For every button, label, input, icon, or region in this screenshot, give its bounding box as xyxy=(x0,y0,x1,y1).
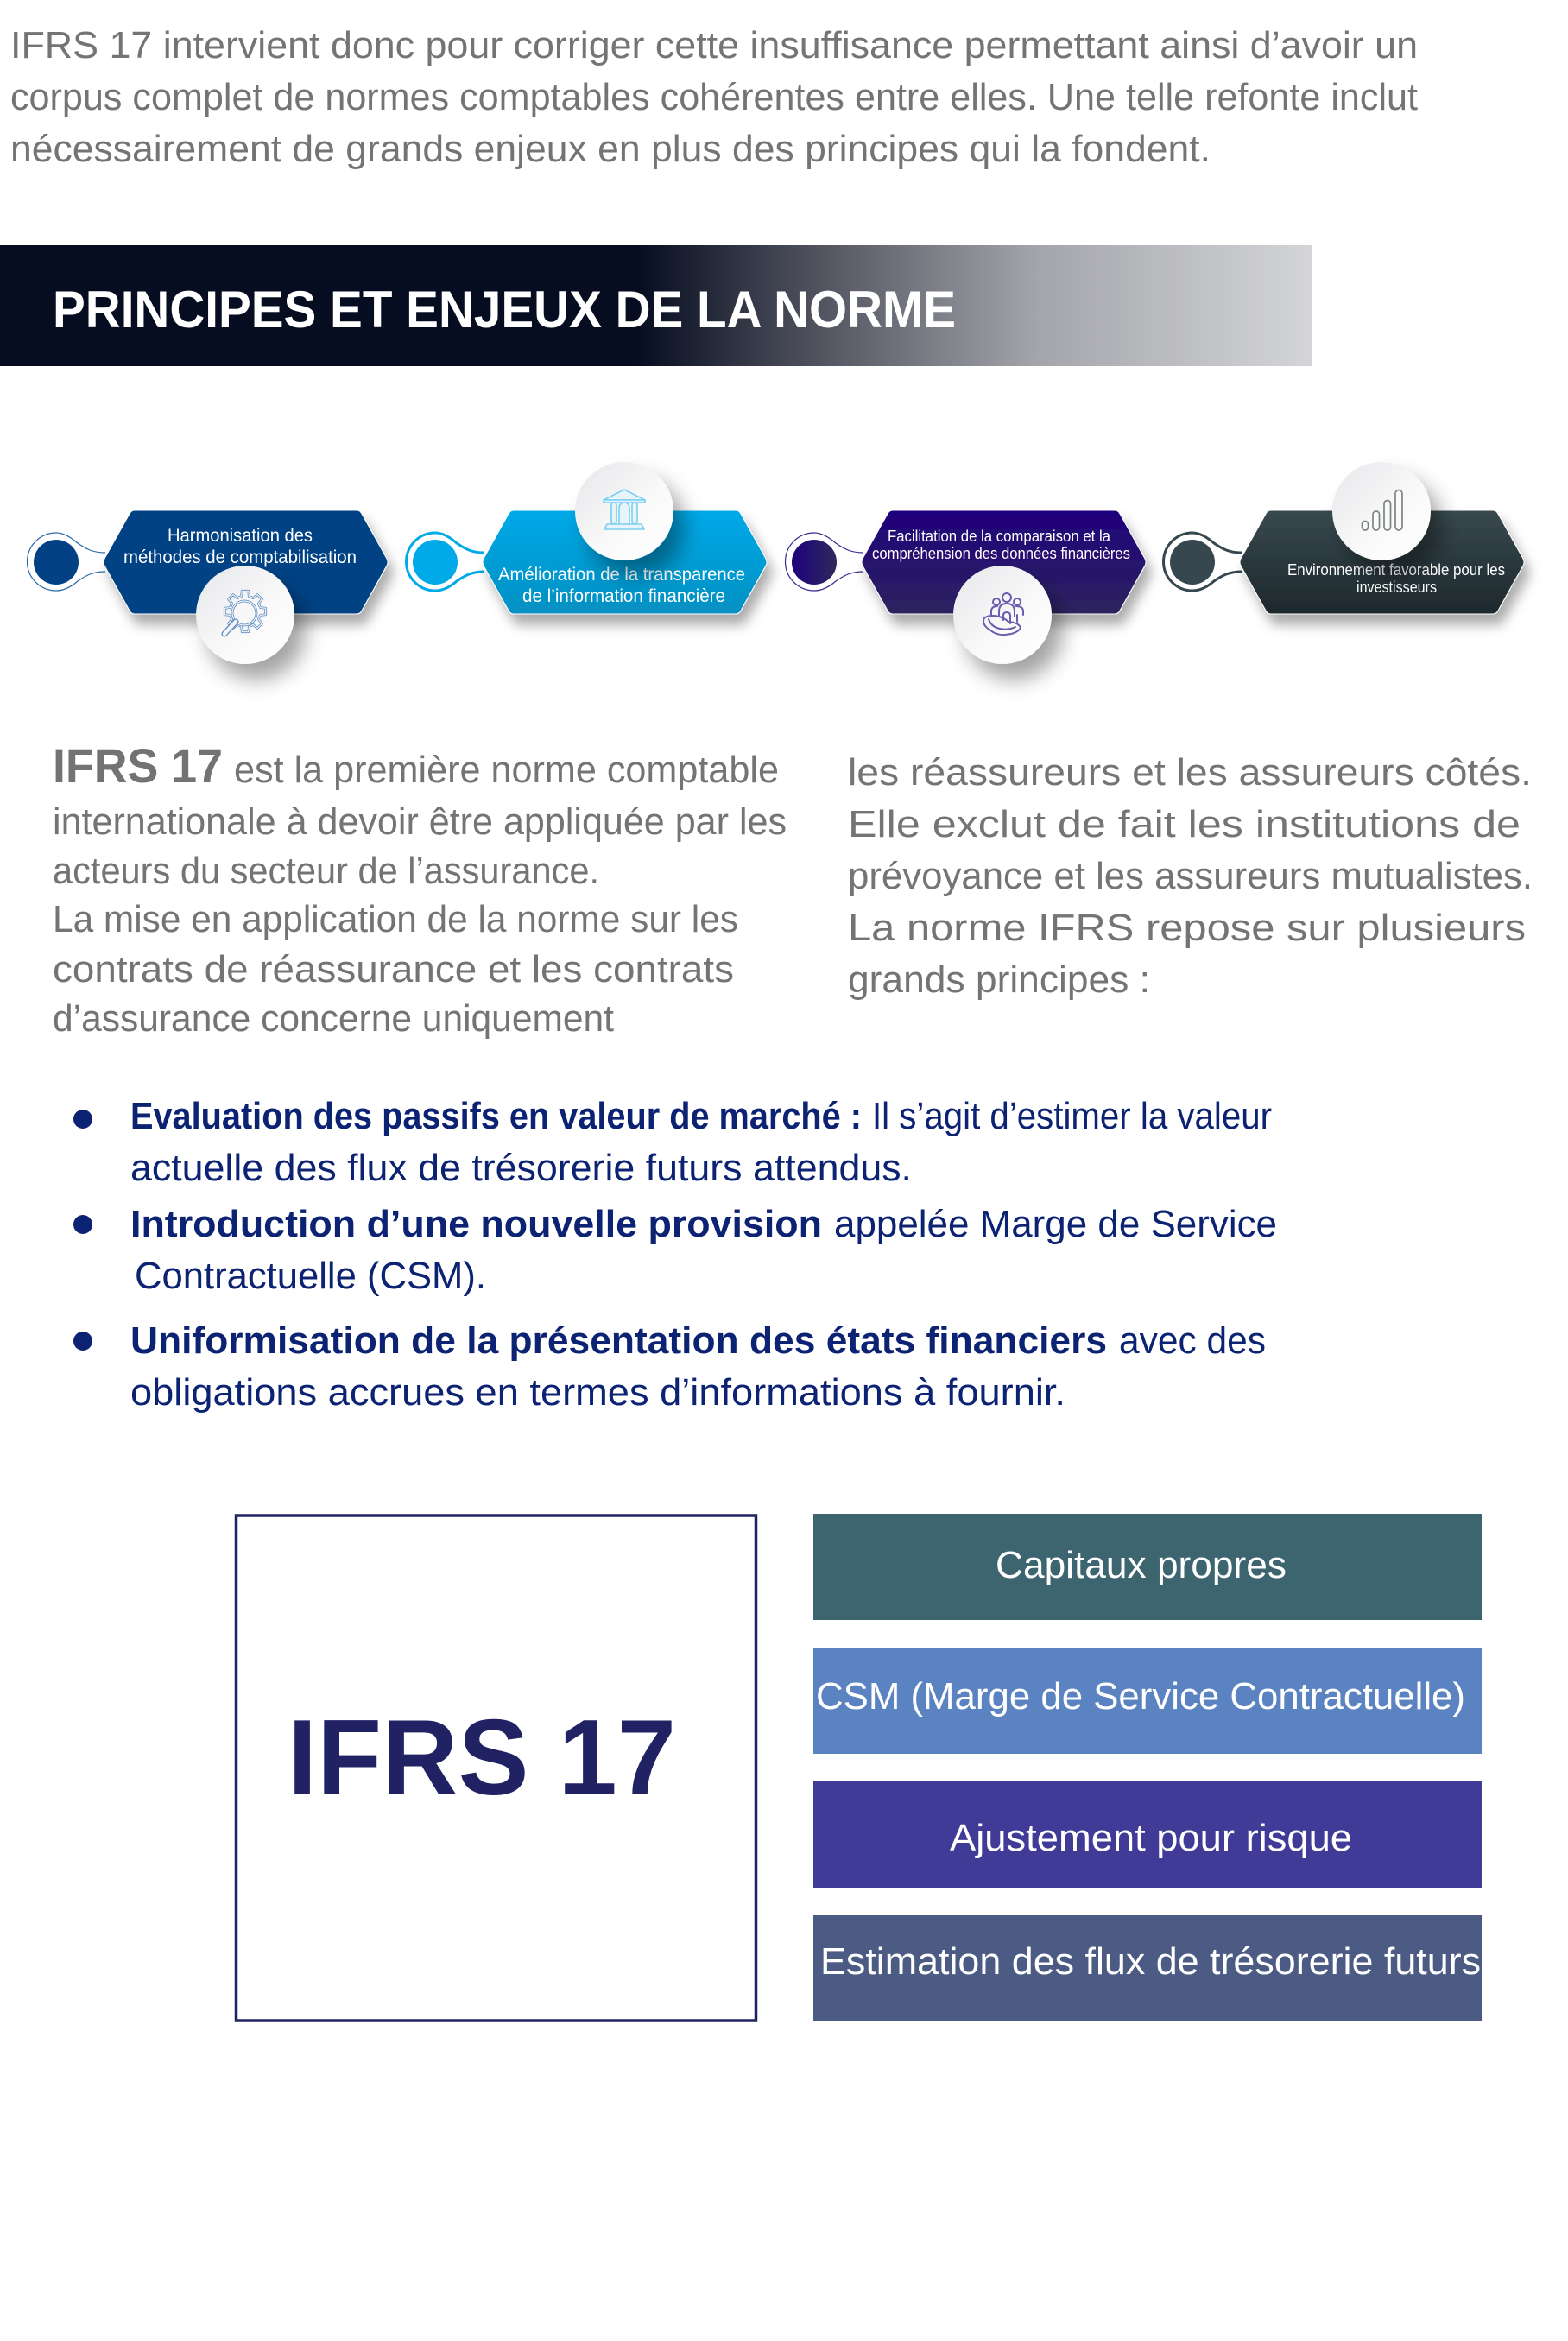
bullet: provision: appelée Marge de Service xyxy=(834,1203,1277,1245)
panel: harmonisation xyxy=(27,510,388,664)
hexagon label: investisseurs xyxy=(1356,579,1437,596)
left text column: La mise en application de la norme sur les xyxy=(53,898,738,940)
right text column: Elle exclut de fait les institutions de xyxy=(848,803,1521,845)
bullet: evaluation: Evaluation des passifs en valeur de marché : xyxy=(130,1095,862,1137)
intro paragraph: IFRS 17 intervient donc pour corriger cette insuffisance permettant ainsi d’avoir un xyxy=(10,24,1418,66)
bar: ajustement pour risque: Ajustement pour risque xyxy=(950,1817,1352,1859)
hexagon label xyxy=(1240,510,1524,614)
panel: transparence xyxy=(406,462,767,614)
hexagon label: Amélioration de la transparence xyxy=(498,565,745,585)
connector knob xyxy=(27,533,105,591)
bar: ajustement pour risque xyxy=(813,1781,1482,1888)
intro paragraph xyxy=(10,24,1418,170)
left text column: est la première norme comptable xyxy=(234,749,779,791)
left text column: contrats de réassurance et les contrats xyxy=(53,948,734,990)
left text column: d’assurance concerne uniquement xyxy=(53,997,614,1040)
bar: capitaux propres xyxy=(813,1514,1482,1620)
intro paragraph: nécessairement de grands enjeux en plus des principes qui la fondent. xyxy=(10,128,1211,170)
bar: CSM xyxy=(813,1648,1482,1754)
hexagon label: Facilitation de la comparaison et la xyxy=(888,528,1111,545)
bullet: evaluation: actuelle des flux de trésorerie futurs attendus. xyxy=(130,1147,912,1189)
bullet: uniformisation xyxy=(73,1319,1266,1414)
right text column: La norme IFRS repose sur plusieurs xyxy=(848,907,1526,949)
icon: gear and magnifier xyxy=(196,566,294,664)
bullet: evaluation: Il s’agit d’estimer la valeur xyxy=(872,1095,1272,1137)
panel: comparaison xyxy=(786,510,1146,664)
bullet: uniformisation: obligations accrues en termes d’informations à fournir. xyxy=(130,1371,1065,1414)
bullet: provision: Introduction d’une nouvelle provision xyxy=(130,1203,822,1245)
hexagon label: Environnement favorable pour les xyxy=(1287,561,1505,579)
left text column xyxy=(53,738,787,1040)
bullet: evaluation xyxy=(73,1095,1272,1189)
connector knob xyxy=(1164,533,1242,591)
connector knob xyxy=(406,533,484,591)
bullet: uniformisation: avec des xyxy=(1119,1319,1266,1362)
panel: investisseurs xyxy=(1164,462,1524,614)
intro paragraph: corpus complet de normes comptables cohérentes entre elles. Une telle refonte inclut xyxy=(10,76,1418,118)
bullet: provision xyxy=(73,1203,1277,1297)
bullet: uniformisation: Uniformisation de la présentation des états financiers xyxy=(130,1319,1107,1362)
right text column: les réassureurs et les assureurs côtés. xyxy=(848,751,1532,794)
hexagon label: Harmonisation des xyxy=(168,526,313,546)
bar: CSM: CSM (Marge de Service Contractuelle) xyxy=(816,1675,1465,1718)
hexagon label xyxy=(104,510,388,614)
icon: bank building xyxy=(575,462,673,560)
section heading banner xyxy=(0,245,1312,366)
icon: rising bars xyxy=(1332,462,1431,560)
bar: capitaux propres: Capitaux propres xyxy=(996,1544,1287,1586)
bar: estimation des flux xyxy=(813,1915,1482,2021)
section heading banner: PRINCIPES ET ENJEUX DE LA NORME xyxy=(53,281,956,338)
connector knob xyxy=(786,533,863,591)
IFRS 17 box xyxy=(237,1515,756,2021)
right text column xyxy=(848,751,1533,1001)
right text column: prévoyance et les assureurs mutualistes. xyxy=(848,855,1533,897)
hexagon label: méthodes de comptabilisation xyxy=(123,547,357,567)
hexagon label xyxy=(862,510,1146,614)
hexagon label: de l’information financière xyxy=(522,586,725,606)
icon: people over hand xyxy=(953,566,1052,664)
hexagon label xyxy=(483,510,767,614)
left text column: IFRS 17 xyxy=(53,738,223,793)
right text column: grands principes : xyxy=(848,959,1150,1001)
bar: estimation des flux: Estimation des flux de trésorerie futurs xyxy=(820,1940,1481,1983)
left text column: internationale à devoir être appliquée par les xyxy=(53,800,787,843)
left text column: acteurs du secteur de l’assurance. xyxy=(53,850,599,892)
bullet: provision: Contractuelle (CSM). xyxy=(135,1255,486,1297)
IFRS 17 box: IFRS 17 xyxy=(288,1699,676,1818)
hexagon label: compréhension des données financières xyxy=(872,545,1130,562)
